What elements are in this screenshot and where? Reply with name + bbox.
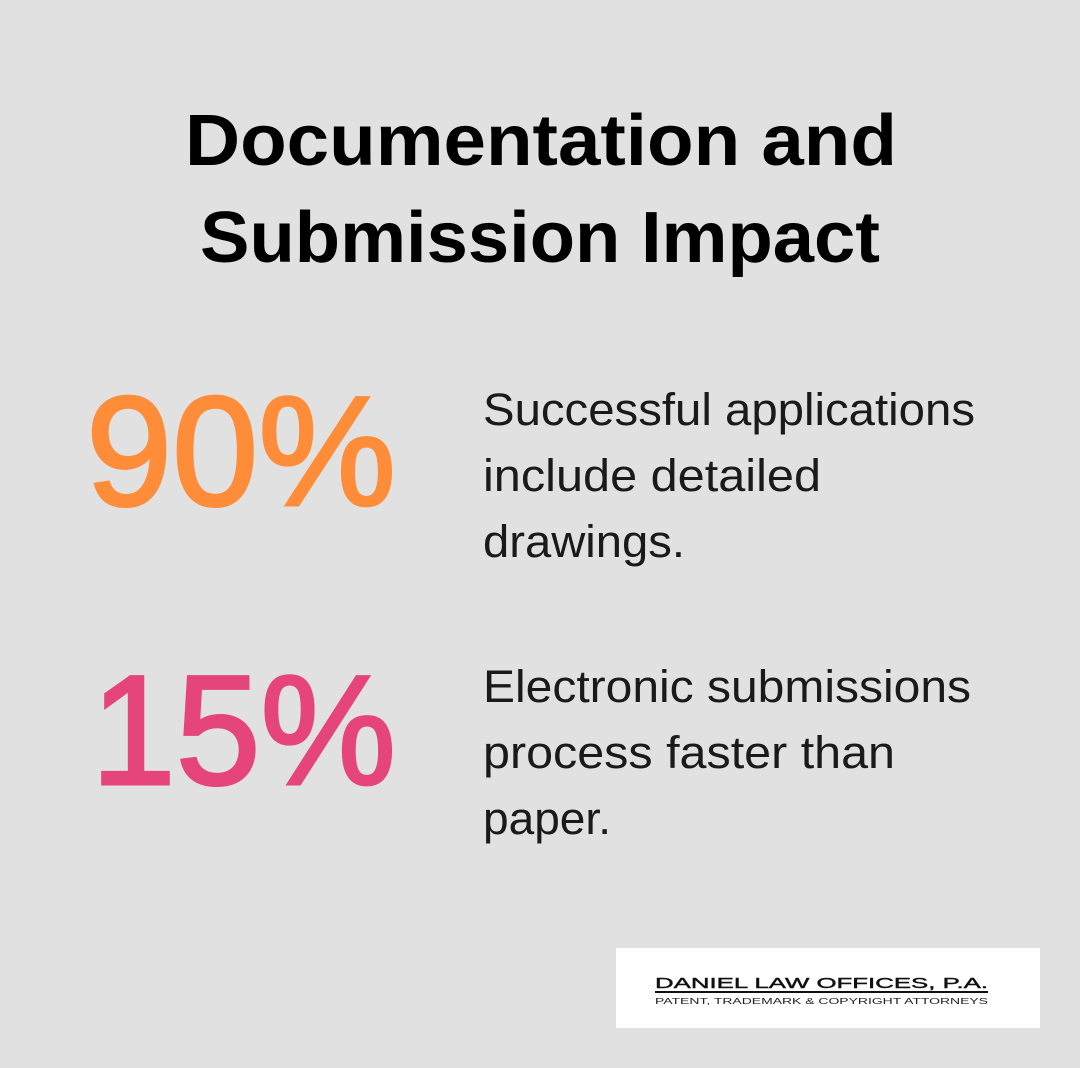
description 1: drawings. xyxy=(483,516,685,567)
title xyxy=(185,101,897,278)
description 2: paper. xyxy=(483,793,611,844)
description 1 xyxy=(483,384,975,567)
description 2 xyxy=(483,661,971,844)
logo: PATENT, TRADEMARK & COPYRIGHT ATTORNEYS xyxy=(655,997,988,1006)
description 2: Electronic submissions xyxy=(483,661,971,712)
number 90%: 90% xyxy=(86,365,396,539)
stat: 15% xyxy=(91,644,971,844)
title: Submission Impact xyxy=(200,198,880,278)
number 15%: 15% xyxy=(91,644,396,818)
description 1: include detailed xyxy=(483,450,821,501)
description 2: process faster than xyxy=(483,727,895,778)
logo: DANIEL LAW OFFICES, P.A. xyxy=(655,975,988,992)
title: Documentation and xyxy=(185,101,897,181)
description 1: Successful applications xyxy=(483,384,975,435)
stat: 90% xyxy=(86,365,975,567)
logo xyxy=(616,948,1040,1028)
